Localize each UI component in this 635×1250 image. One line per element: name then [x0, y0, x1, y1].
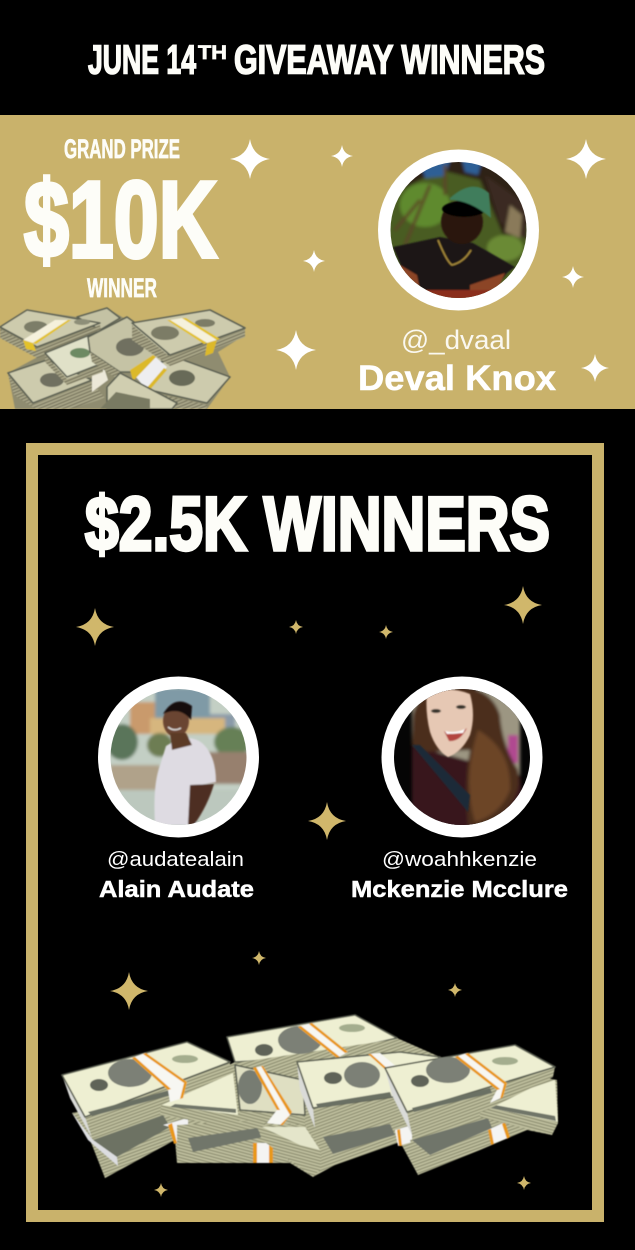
heading: winner: WINNER — [87, 273, 157, 303]
avatar: Deval Knox — [378, 150, 539, 310]
heading: $10K: $10K — [24, 159, 217, 281]
title: TH — [198, 43, 227, 64]
name: Deval Knox: Deval Knox — [358, 359, 557, 398]
stack left front — [85, 1062, 230, 1138]
panel: grand prize band — [0, 115, 635, 409]
name: Mckenzie Mcclure: Mckenzie Mcclure — [351, 876, 568, 902]
title — [88, 36, 545, 82]
icons: white sparkles — [230, 139, 609, 382]
icons: gold sparkles — [76, 586, 542, 1197]
illustration: large cash pile — [62, 1015, 558, 1178]
handle: @woahhkenzie: @woahhkenzie — [382, 848, 537, 871]
panel: $2.5K winners frame — [32, 449, 598, 1216]
lower right-center stack — [320, 1122, 400, 1170]
avatar: Alain Audate — [98, 676, 259, 838]
name: Alain Audate: Alain Audate — [99, 876, 254, 902]
pile silhouette — [72, 1015, 558, 1178]
stack middle vertical — [235, 1065, 305, 1115]
handle: @_dvaal: @_dvaal — [401, 325, 511, 355]
lower left stack — [72, 1100, 173, 1178]
lower center stack — [177, 1120, 290, 1163]
handle: @audatealain: @audatealain — [107, 848, 244, 871]
lower right stack — [410, 1120, 527, 1175]
heading: grand prize: GRAND PRIZE — [64, 134, 180, 164]
title: JUNE 14 — [88, 36, 196, 82]
angled center stack — [257, 1125, 322, 1177]
stack right front — [407, 1067, 555, 1135]
stack center front — [313, 1097, 393, 1128]
illustration: cash pile on gold band — [0, 308, 245, 409]
far right stack — [480, 1080, 558, 1135]
avatar: Mckenzie Mcclure — [382, 676, 542, 838]
stack top center — [227, 1015, 397, 1062]
left-center flat stack — [160, 1073, 238, 1128]
